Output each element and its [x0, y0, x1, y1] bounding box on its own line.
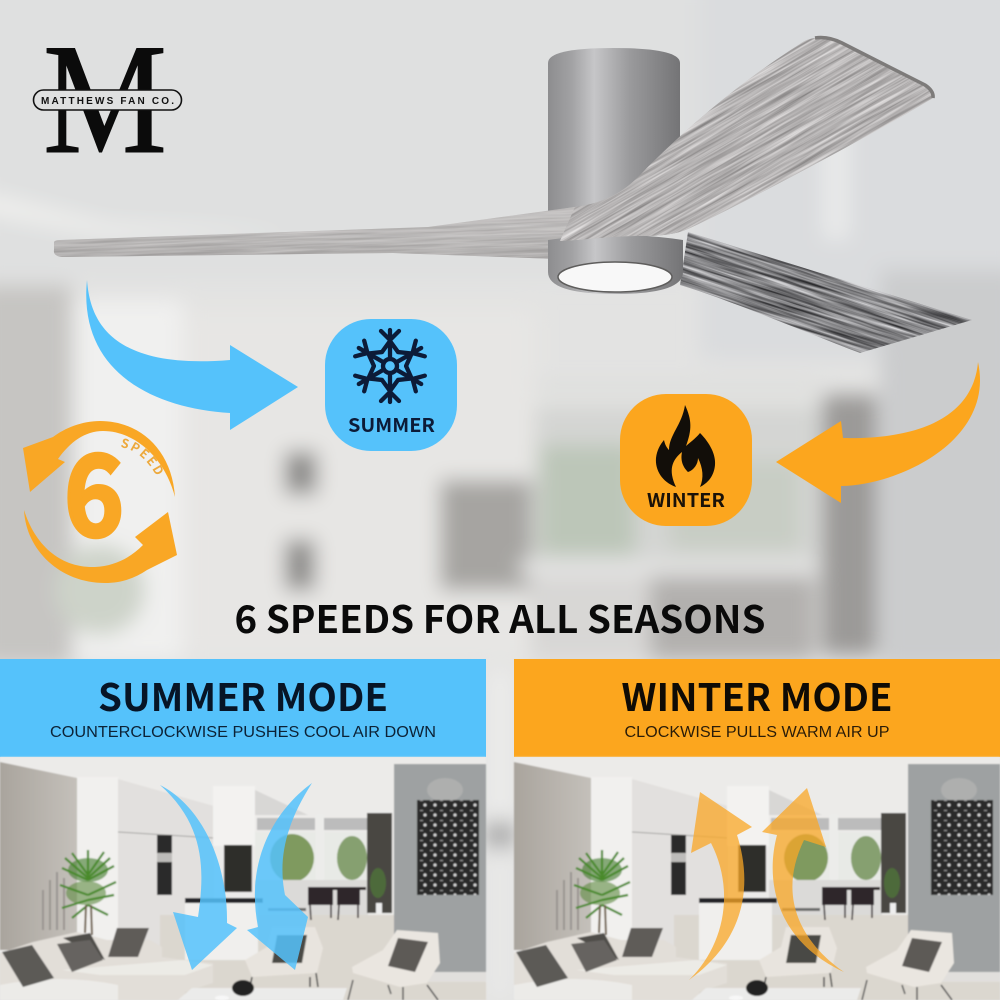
summer room photo — [0, 757, 486, 1000]
logo: Matthews Fan Co.: MATTHEWS FAN CO. — [41, 96, 174, 107]
icon: flame — [656, 405, 715, 487]
arrow: winter airflow — [776, 362, 980, 503]
fan blade: upper — [560, 36, 935, 241]
arrow: summer airflow — [86, 280, 298, 430]
icon: snowflake — [354, 330, 426, 402]
heading: 6 SPEEDS FOR ALL SEASONS — [234, 589, 766, 644]
winter badge — [620, 394, 752, 526]
fan — [28, 0, 1000, 466]
arrows: cool air pushed down — [160, 783, 312, 970]
fan blade: lower dark — [680, 232, 972, 353]
label: winter: WINTER — [647, 486, 725, 513]
top rotating arrow — [23, 421, 175, 497]
fan light housing — [548, 235, 683, 294]
fan canopy cylinder — [548, 48, 680, 215]
speed arc label — [121, 438, 163, 474]
label: summer: SUMMER — [348, 411, 435, 438]
panel: winter mode — [514, 659, 1000, 1000]
fan blade: left — [54, 207, 575, 259]
winter header band — [514, 659, 1000, 757]
icon: 6 speed — [23, 407, 177, 583]
bottom rotating arrow — [24, 510, 177, 583]
summer caption: COUNTERCLOCKWISE PUSHES COOL AIR DOWN — [50, 724, 436, 741]
panel: summer mode — [0, 659, 486, 1000]
winter caption: CLOCKWISE PULLS WARM AIR UP — [624, 724, 890, 741]
logo: Matthews Fan Co.: M — [43, 12, 167, 187]
summer title: SUMMER MODE — [98, 667, 388, 722]
winter title: WINTER MODE — [622, 667, 892, 722]
summer header band — [0, 659, 486, 757]
winter room photo — [514, 757, 1000, 1000]
arrows: warm air pulled up — [689, 788, 844, 980]
speed arc label: SPEED — [121, 438, 163, 474]
numeral 6: 6 — [64, 407, 124, 569]
summer badge — [325, 319, 457, 451]
